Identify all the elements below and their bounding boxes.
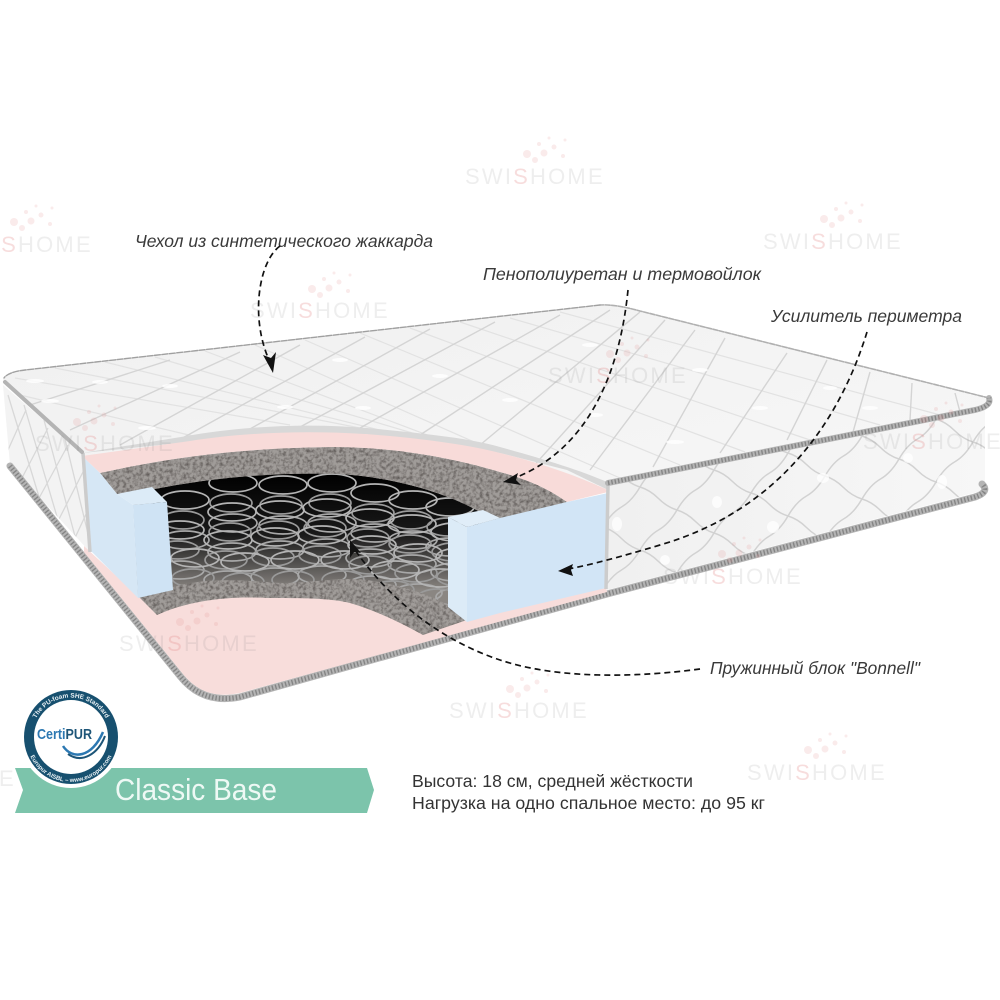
badge: CertiPUR: CertiPUR [37, 726, 92, 743]
mattress [3, 305, 1000, 699]
watermarks: SWISHOME [863, 429, 1000, 454]
perimeter foam: right block [448, 493, 608, 622]
watermarks: SWISHOME [35, 431, 175, 456]
cut edges [83, 453, 608, 589]
label: spring block: Пружинный блок "Bonnell" [710, 658, 921, 678]
cutaway: top pink foam [82, 426, 608, 502]
watermarks: SWISHOME [250, 298, 390, 323]
watermarks: SWISHOME [119, 631, 259, 656]
watermarks: SWISHOME [449, 698, 589, 723]
watermarks: SWISHOME [465, 164, 605, 189]
watermarks: SWISHOME [548, 363, 688, 388]
cutaway: felt layer [100, 447, 567, 635]
watermarks [0, 136, 1000, 791]
watermarks: SWISHOME [663, 564, 803, 589]
cutaway: bottom pink foam [84, 546, 607, 695]
perimeter foam: left block [82, 456, 173, 598]
info text: Высота: 18 см, средней жёсткости [412, 771, 693, 791]
cutaway: felt front edge over springs [138, 579, 470, 638]
bottom seam [10, 466, 985, 699]
label: foam and felt: Пенополиуретан и термовойлок [483, 264, 762, 284]
panel: right side fabric [607, 411, 985, 590]
arrow: cover [259, 246, 280, 373]
arrow: spring block [350, 540, 700, 675]
label: cover: Чехол из синтетического жаккарда [135, 231, 433, 251]
watermarks: SWISHOME [763, 229, 903, 254]
arrow: perimeter [558, 332, 867, 576]
info text: Нагрузка на одно спальное место: до 95 кг [412, 793, 765, 813]
badge: CertiPUR: Europur AISBL – www.europur.com [30, 754, 112, 782]
spring block "Bonnell" [153, 474, 479, 605]
panel: top quilted surface [3, 306, 986, 485]
badge: CertiPUR [24, 690, 118, 788]
badge: CertiPUR: The PU-foam SHE Standard [32, 693, 110, 718]
ribbon: model name [15, 768, 374, 813]
panel: left side fabric [3, 385, 92, 552]
ribbon title: Classic Base [115, 772, 277, 807]
label: perimeter: Усилитель периметра [770, 306, 962, 326]
watermarks: SWISHOME [747, 760, 887, 785]
top seams [4, 305, 989, 483]
arrow: foam and felt [503, 290, 628, 485]
info text [412, 771, 765, 813]
